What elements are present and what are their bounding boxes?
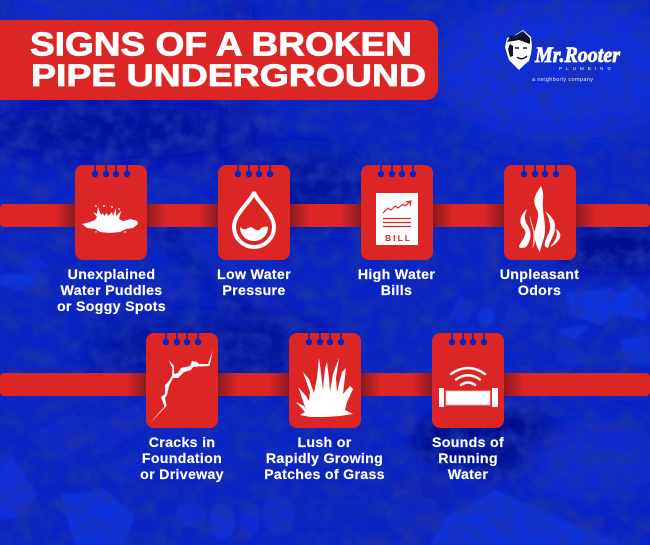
title text: PIPE UNDERGROUND bbox=[31, 57, 426, 93]
label: lush grass: Lush or bbox=[297, 435, 352, 451]
pipe bar: bottom row bbox=[0, 373, 650, 396]
label: sounds of running water: Sounds of bbox=[432, 435, 504, 451]
icon: crack bbox=[150, 350, 213, 423]
label: cracks: Cracks in bbox=[149, 435, 215, 451]
label: lush grass: Rapidly Growing bbox=[266, 451, 383, 467]
card: unpleasant odors bbox=[504, 165, 576, 260]
card: low water pressure bbox=[218, 165, 290, 260]
label: high water bills: Bills bbox=[381, 283, 412, 299]
label: unpleasant odors: Unpleasant bbox=[500, 267, 579, 283]
icon: puddle with splash bbox=[82, 205, 138, 233]
plumbing: PLUMBING bbox=[559, 66, 611, 71]
card: sounds of running water bbox=[432, 333, 504, 428]
title text: SIGNS OF A BROKEN bbox=[30, 26, 412, 62]
icon: pipe with sound waves bbox=[439, 368, 498, 407]
card: high water bills bbox=[361, 165, 433, 260]
icon: grass bbox=[296, 358, 353, 417]
label: sounds of running water: Running bbox=[438, 451, 498, 467]
card: lush grass bbox=[289, 333, 361, 428]
label: sounds of running water: Water bbox=[448, 467, 488, 483]
card: cracks bbox=[146, 333, 218, 428]
label: cracks: Foundation bbox=[142, 451, 222, 467]
label: low water pressure: Pressure bbox=[222, 283, 286, 299]
mascot head bbox=[505, 30, 532, 70]
label: water puddles: Unexplained bbox=[68, 267, 155, 283]
label: lush grass: Patches of Grass bbox=[264, 467, 385, 483]
card: water puddles bbox=[75, 165, 147, 260]
icon: flames bbox=[519, 186, 560, 252]
pipe bar: top row bbox=[0, 204, 650, 227]
icon: water drop bbox=[234, 192, 274, 247]
label: water puddles: Water Puddles bbox=[61, 283, 162, 299]
label: water puddles: or Soggy Spots bbox=[57, 299, 166, 315]
label: cracks: or Driveway bbox=[140, 467, 224, 483]
label: unpleasant odors: Odors bbox=[518, 283, 561, 299]
label: low water pressure: Low Water bbox=[217, 267, 291, 283]
icon: bill: BILL bbox=[385, 233, 410, 243]
title banner bbox=[0, 20, 438, 100]
title text bbox=[30, 26, 426, 93]
tagline: a neighborly company bbox=[532, 77, 593, 83]
logo: Mr. Rooter Plumbing bbox=[505, 30, 620, 83]
wordmark: Mr.Rooter bbox=[534, 42, 620, 67]
label: high water bills: High Water bbox=[358, 267, 435, 283]
